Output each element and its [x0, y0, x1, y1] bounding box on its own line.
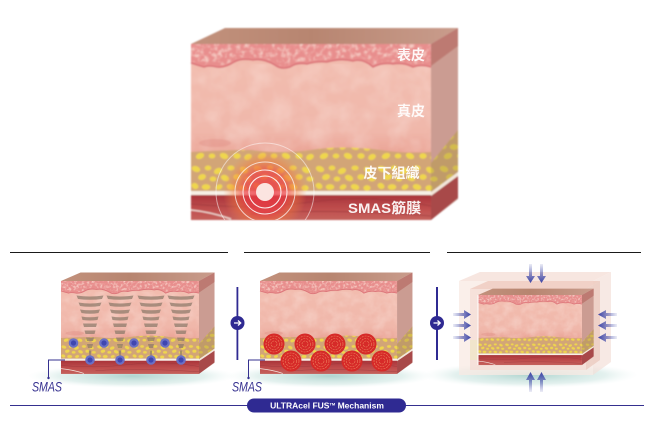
caption pill: Mechanism: [335, 400, 384, 410]
panel: step 1 focused ultrasound cones: [28, 273, 236, 388]
compression arrows left: [453, 310, 471, 342]
header rule: step 3: [447, 252, 641, 253]
ultrasound focal point rings: [216, 142, 314, 220]
main skin block diagram: [191, 28, 458, 241]
SMAS callout 2: SMAS: [232, 378, 262, 394]
SMAS callout 1: SMAS: [32, 378, 62, 394]
ghost outlines of original block size: [459, 272, 611, 375]
compression arrows bottom: [526, 372, 546, 392]
red heat circles: [264, 334, 392, 372]
arrow: step 1 to step 2: [230, 287, 244, 360]
compression arrows top: [526, 264, 546, 283]
caption pill: [247, 398, 406, 412]
layer label: epidermis: 表皮: [397, 47, 425, 63]
layer label: dermis: 真皮: [397, 103, 425, 119]
ultrasound cones: [76, 296, 194, 356]
SMAS callout 2: [232, 360, 265, 394]
header rule: step 1: [10, 252, 228, 253]
blue focal dots: [69, 338, 186, 365]
bottom rule: [10, 405, 644, 406]
layer label: SMAS fascia: SMAS筋膜: [348, 200, 421, 216]
caption pill: ULTRAcel FUS: [270, 400, 329, 410]
panel: step 2 thermal coagulation zones: [226, 273, 434, 388]
caption pill: TM: [329, 402, 336, 406]
panel: step 3 tissue contraction: [422, 264, 638, 392]
layer label: subcutaneous tissue: 皮下組織: [364, 165, 420, 181]
arrow: step 2 to step 3: [430, 287, 444, 360]
header rule: step 2: [244, 252, 430, 253]
SMAS callout 1: [32, 360, 65, 394]
compression arrows right: [598, 310, 617, 342]
